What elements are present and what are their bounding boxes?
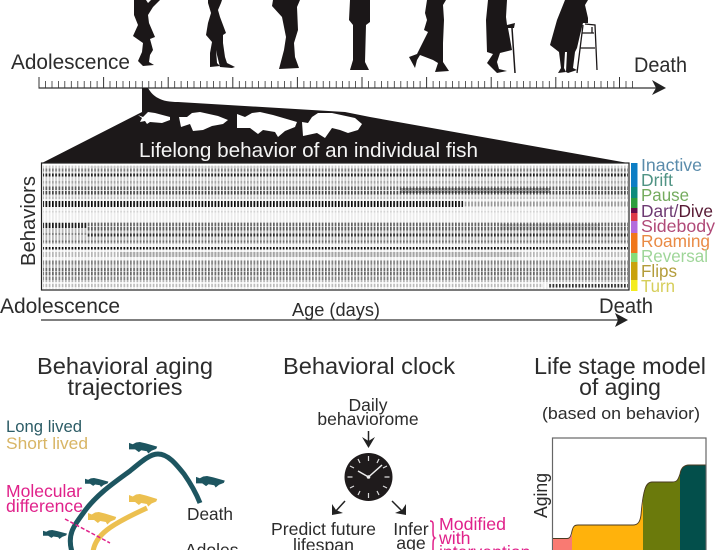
behavior legend labels — [641, 155, 715, 296]
label: Death on trajectory: Death — [187, 504, 233, 524]
fish: short lived adult — [129, 494, 157, 506]
fish: long lived adult 2 — [129, 442, 157, 454]
step chart frame — [552, 438, 706, 550]
long lived trajectory curve — [70, 454, 200, 550]
label: daily behaviorome: Daily — [349, 395, 388, 415]
behavior legend labels: Flips — [641, 261, 677, 281]
behavior color key strip — [631, 163, 638, 291]
arrow: clock to predict lifespan — [332, 501, 345, 515]
label: molecular difference: Molecular — [6, 481, 82, 501]
heading: lifelong behavior: Lifelong behavior of an individual fish — [139, 139, 478, 162]
arrow: clock to infer age — [392, 501, 406, 515]
legend: long lived: Long lived — [6, 417, 82, 436]
behavior legend labels: Pause — [641, 185, 689, 205]
timeline arrowhead — [652, 80, 666, 95]
fish icon 4 — [302, 113, 362, 138]
panel: behavioral clock: behaviorome — [317, 409, 419, 429]
step: salmon — [553, 534, 572, 550]
step: dark teal — [680, 465, 706, 550]
silhouette: middle aged — [349, 0, 370, 70]
axis label: Behaviors: Behaviors — [17, 176, 40, 266]
step: amber — [572, 500, 643, 550]
axis label: Aging: Aging — [531, 473, 551, 518]
silhouette: adolescent — [133, 0, 160, 66]
timeline axis with ticks and arrow — [38, 77, 660, 88]
behavior legend labels: Reversal — [641, 246, 708, 266]
panel: behavioral aging trajectories: difference — [6, 496, 83, 516]
behavior legend labels: Inactive — [641, 155, 702, 175]
silhouettes: human life stages — [133, 0, 597, 73]
short lived trajectory curve — [93, 508, 147, 550]
fish icon 3 — [237, 112, 297, 137]
silhouette: older woman walking — [409, 0, 449, 72]
panel: behavioral clock — [271, 353, 530, 550]
behavior legend labels: Sidebody — [641, 216, 715, 236]
silhouette: adult — [272, 0, 300, 69]
icon: clock — [344, 453, 392, 501]
fish: long lived old — [196, 476, 225, 488]
silhouette: elderly with walker — [550, 0, 597, 73]
label: Death (timeline): Death — [634, 54, 687, 77]
brace: intervention — [430, 521, 435, 550]
age axis arrow — [41, 313, 628, 327]
fish: long lived adult 1 — [85, 478, 108, 487]
black zoom shape: lifelong behavior — [42, 88, 628, 163]
panel: behavioral aging trajectories — [6, 353, 245, 550]
title: life stage model of aging: Life stage model — [534, 353, 706, 379]
label: Adolescence (heatmap): Adolescence — [0, 295, 120, 318]
silhouette: young woman — [206, 0, 235, 68]
heatmap: behaviors over age — [42, 163, 629, 290]
title: behavioral aging trajectories: Behavioral aging — [37, 353, 213, 379]
behavior legend labels: Roaming — [641, 231, 710, 251]
subtitle: based on behavior: (based on behavior) — [542, 404, 700, 423]
label: infer age: Infer — [393, 519, 429, 539]
step: olive — [643, 474, 680, 550]
legend: short lived: Short lived — [6, 434, 88, 453]
label: modified with intervention: with — [438, 528, 470, 548]
fish icon 2 — [179, 112, 228, 131]
molecular difference dashed line — [65, 519, 110, 543]
title: behavioral clock: Behavioral clock — [283, 353, 456, 379]
fish: long lived young — [43, 530, 67, 539]
label: Death (heatmap): Death — [599, 295, 653, 318]
silhouette: elderly with cane — [486, 0, 515, 73]
axis label: Age (days): Age (days) — [292, 300, 380, 320]
label: modified with intervention: Modified — [439, 514, 506, 534]
panel: life stage model of aging: of aging — [579, 374, 661, 400]
step outline — [553, 465, 706, 538]
fish icon 1 — [138, 112, 170, 124]
panel: behavioral aging trajectories: trajectories — [68, 374, 182, 400]
arrow: behaviorome to clock — [362, 431, 375, 448]
behavior legend labels: Dart/Dive — [641, 201, 713, 221]
label: predict future lifespan: Predict future — [271, 519, 376, 539]
fish: short lived young — [88, 512, 116, 524]
behavior legend labels: Turn — [641, 276, 675, 296]
panel: life stage model of aging — [531, 353, 706, 550]
behavior legend labels: Drift — [641, 170, 673, 190]
label: Adolescence (timeline): Adolescence — [11, 51, 130, 74]
